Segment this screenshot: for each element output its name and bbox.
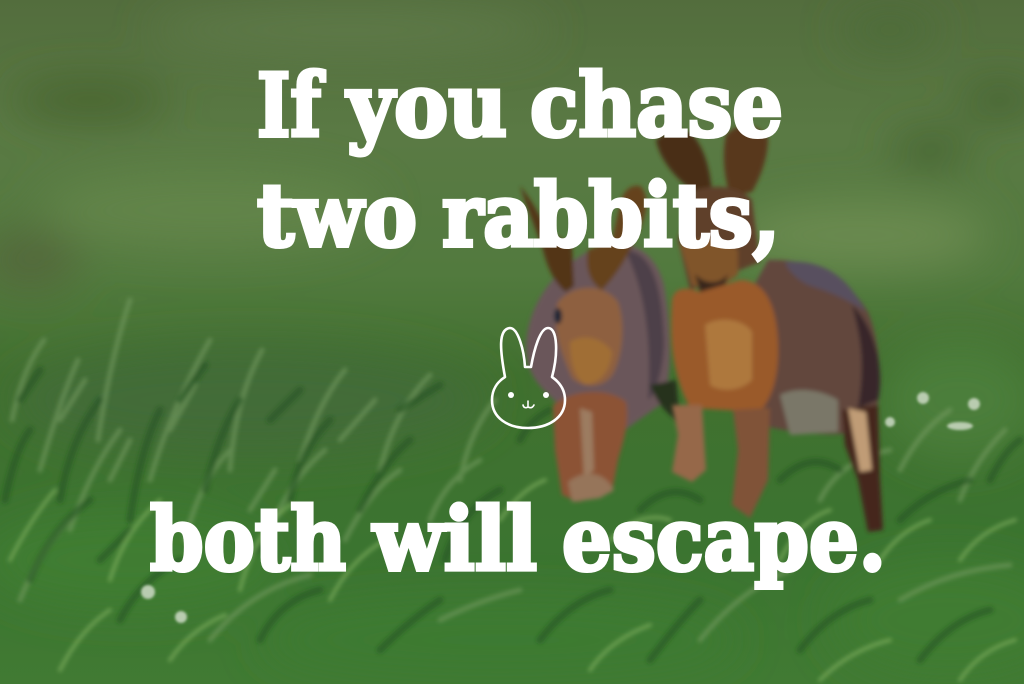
title: third line: will <box>372 488 537 591</box>
right hare chest <box>671 280 778 412</box>
title: second line <box>257 164 780 267</box>
title: third line: both <box>150 488 346 591</box>
title: first line: If <box>257 54 326 157</box>
white flowers <box>141 392 980 623</box>
title: first line <box>257 54 783 157</box>
left hare chest and legs <box>553 392 627 502</box>
rabbit: right hare <box>656 126 883 532</box>
title: third line: escape. <box>562 488 886 591</box>
icon: outlined bunny <box>492 328 565 428</box>
title: second line: rabbits, <box>442 164 780 267</box>
right hare ears <box>656 131 712 192</box>
title: second line: two <box>257 164 417 267</box>
title: first line: chase <box>530 54 783 157</box>
left hare head <box>555 288 622 386</box>
rabbit: left hare <box>520 186 680 502</box>
right hare legs <box>672 405 706 482</box>
right hare face <box>680 240 738 292</box>
grass blades <box>5 300 1020 680</box>
title: third line <box>150 488 886 591</box>
title: first line: you <box>345 54 507 157</box>
left hare body <box>526 244 670 430</box>
right hare body <box>735 260 879 434</box>
left hare ears <box>520 186 574 292</box>
